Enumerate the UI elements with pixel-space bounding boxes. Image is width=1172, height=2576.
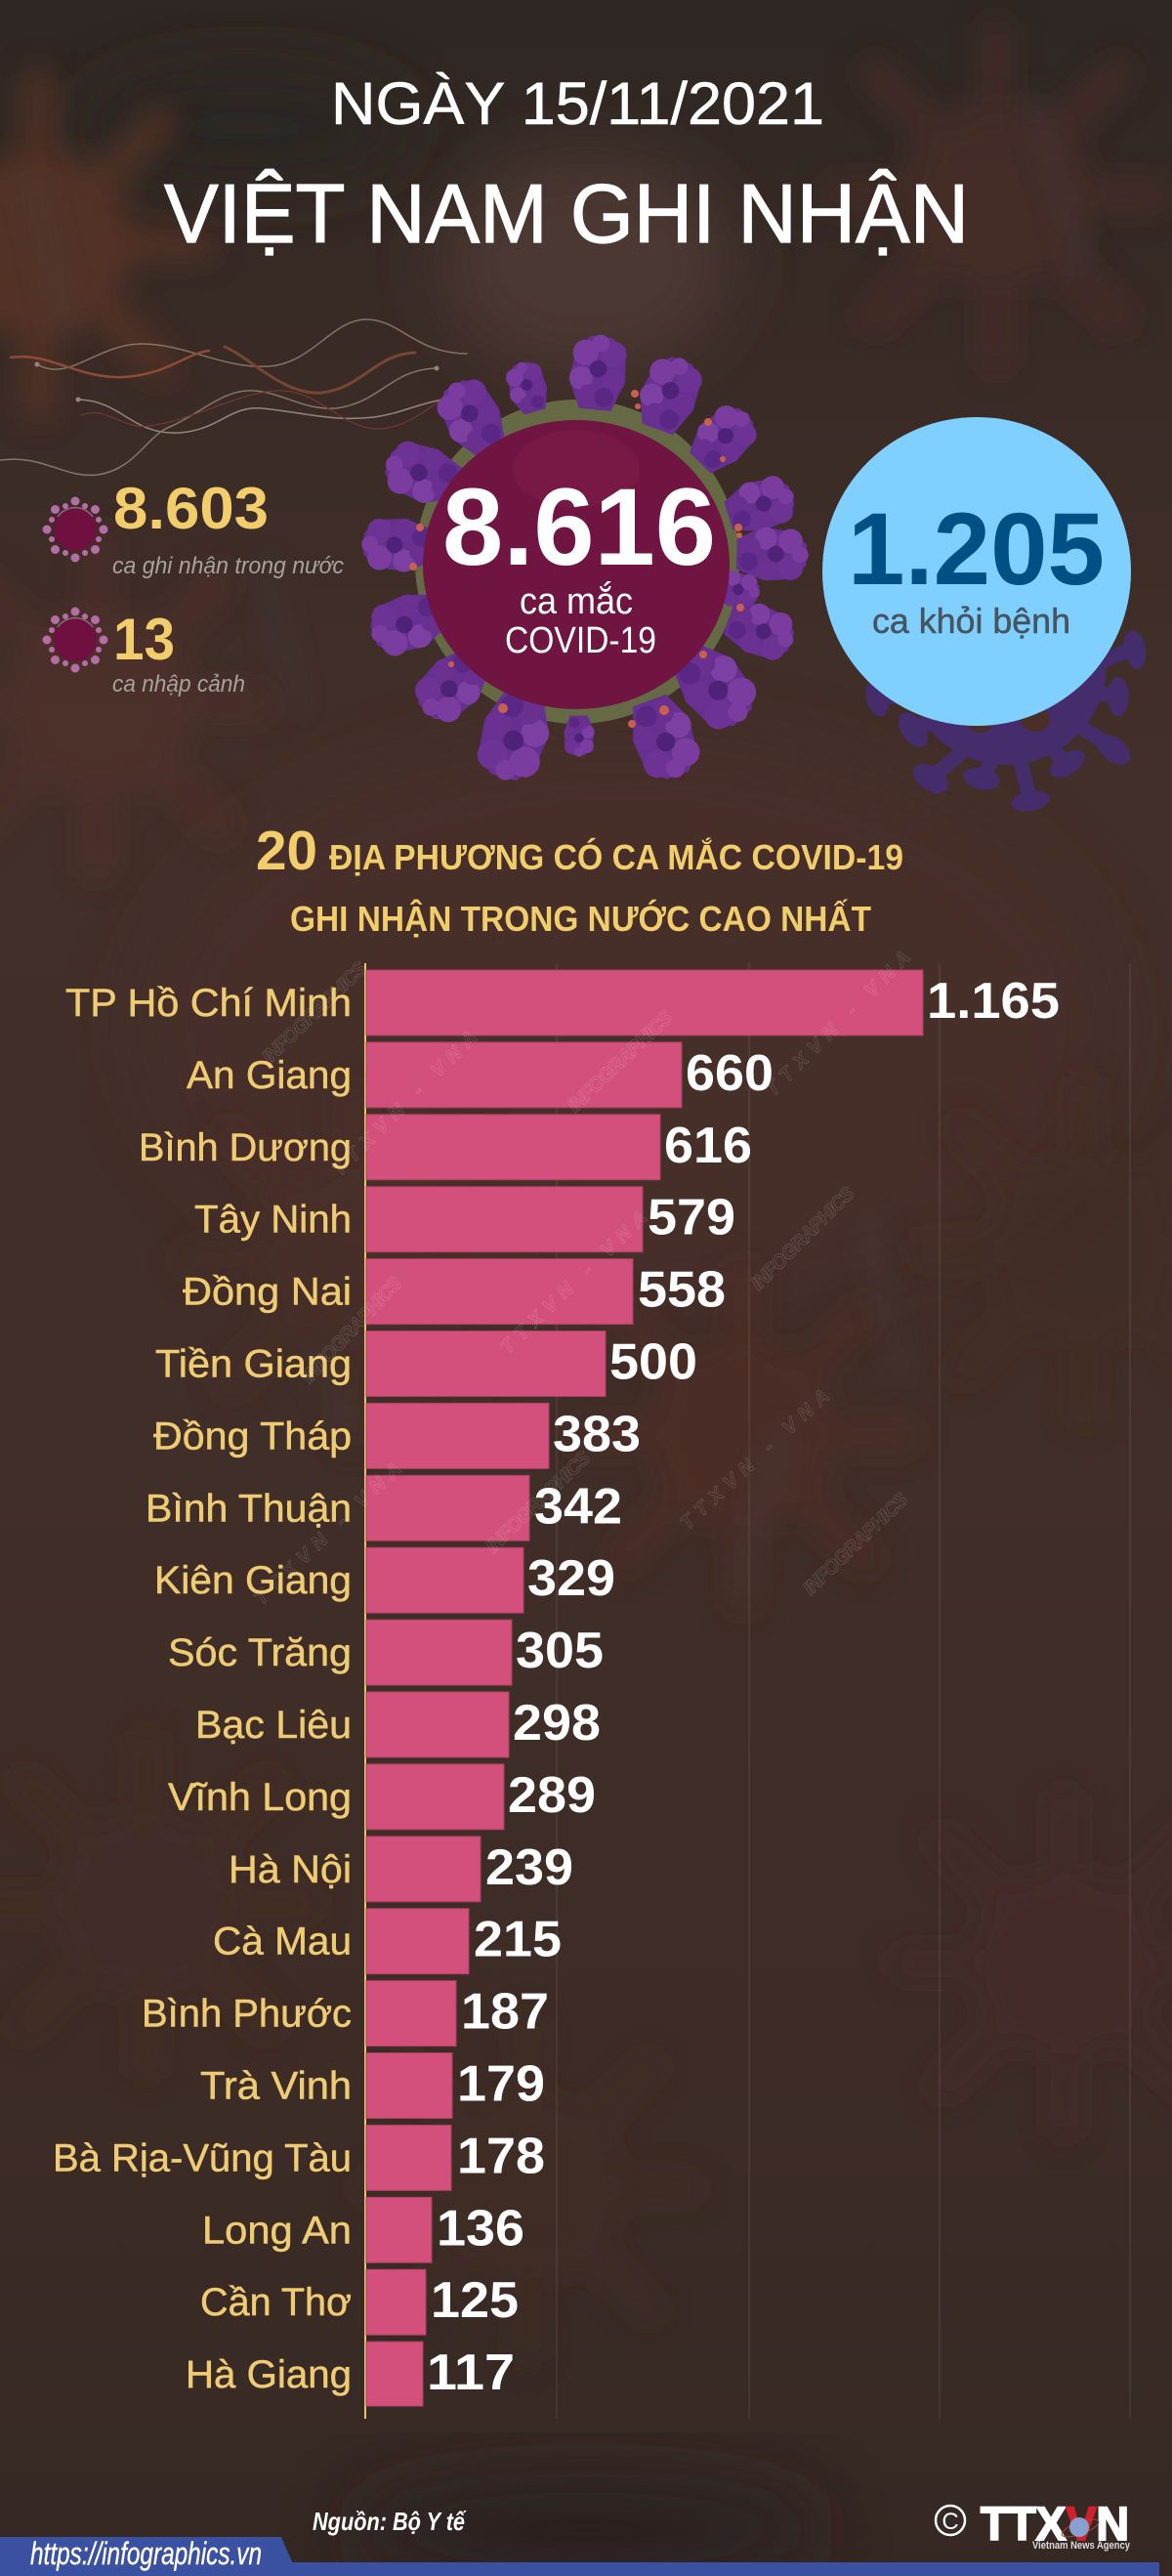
bar: Bình Thuận: Bình Thuận — [146, 1487, 352, 1530]
bar: Cà Mau: Cà Mau — [213, 1921, 352, 1964]
logo: TTXVN: C — [942, 2509, 959, 2535]
watermarks: INFOGRAPHICS — [564, 1006, 678, 1118]
total number: 8.616 — [442, 466, 716, 588]
icon: small virus 2 — [43, 608, 107, 672]
icon: large coronavirus with total cases — [360, 332, 810, 788]
bar: Đồng Tháp: Đồng Tháp — [153, 1415, 352, 1457]
stat: domestic cases: 8.603 — [113, 476, 269, 541]
watermarks: TTXVN - VNA — [328, 1028, 481, 1181]
title: main heading: VIỆT NAM GHI NHẬN — [164, 168, 969, 261]
bar: An Giang: 660 — [686, 1045, 774, 1102]
bar: Vĩnh Long: 289 — [508, 1767, 596, 1824]
bar: Kiên Giang — [154, 1547, 615, 1613]
bar: Đồng Tháp — [153, 1403, 641, 1468]
bar: Đồng Nai — [183, 1259, 726, 1325]
bar: Bạc Liêu: 298 — [513, 1695, 601, 1752]
bar: Bình Thuận — [146, 1475, 622, 1541]
bar: Bình Phước — [142, 1981, 549, 2047]
icon: small virus — [43, 496, 107, 563]
bar: Kiên Giang: Kiên Giang — [154, 1559, 352, 1602]
bar: Bạc Liêu: Bạc Liêu — [195, 1704, 352, 1747]
bar: Tây Ninh: 579 — [648, 1190, 735, 1246]
bar: Bà Rịa-Vũng Tàu: 178 — [457, 2128, 545, 2184]
bar: Tiền Giang — [155, 1330, 697, 1397]
bar: Bà Rịa-Vũng Tàu — [53, 2125, 545, 2190]
bar: Hà Giang — [186, 2342, 515, 2406]
bar: Hà Giang: Hà Giang — [186, 2353, 352, 2396]
bar: Cà Mau: 215 — [474, 1912, 562, 1968]
bar: An Giang — [187, 1042, 774, 1108]
watermarks — [250, 948, 915, 1610]
bar: Đồng Tháp: 383 — [553, 1406, 641, 1462]
stat: imported cases: 13 — [113, 607, 175, 672]
watermarks: INFOGRAPHICS — [258, 957, 372, 1069]
bar: Bà Rịa-Vũng Tàu: Bà Rịa-Vũng Tàu — [53, 2136, 352, 2179]
decorative virus strands — [0, 319, 479, 475]
chart heading — [256, 820, 903, 939]
total caption — [505, 580, 656, 661]
bar: Cần Thơ: 125 — [431, 2272, 519, 2329]
bar: Sóc Trăng: 305 — [516, 1623, 604, 1679]
bar: Vĩnh Long — [168, 1764, 596, 1830]
stat: imported cases: ca nhập cảnh — [112, 671, 245, 697]
watermarks: TTXVN - VNA — [762, 948, 915, 1101]
watermarks: INFOGRAPHICS — [298, 1273, 407, 1387]
chart heading: GHI NHẬN TRONG NƯỚC CAO NHẤT — [290, 898, 871, 939]
stat: imported cases — [43, 607, 245, 697]
bar: Kiên Giang: 329 — [527, 1550, 615, 1607]
watermarks: INFOGRAPHICS — [481, 1447, 596, 1558]
bar: TP Hồ Chí Minh: 1.165 — [927, 973, 1060, 1030]
watermarks: INFOGRAPHICS — [747, 1183, 859, 1295]
icon: dark purple virus behind recovered circle — [861, 564, 1149, 814]
total caption: COVID-19 — [505, 620, 656, 661]
bar: Hà Giang: 117 — [427, 2344, 515, 2401]
bar: Long An: Long An — [202, 2209, 352, 2252]
bar: Bạc Liêu — [195, 1692, 601, 1757]
bar: Hà Nội: Hà Nội — [229, 1848, 352, 1891]
bar: TP Hồ Chí Minh: TP Hồ Chí Minh — [65, 982, 352, 1025]
bar: Bình Dương: Bình Dương — [139, 1126, 352, 1169]
footer bar with URL: https://infographics.vn — [30, 2536, 262, 2571]
stat: domestic cases — [43, 476, 344, 579]
bar: Tiền Giang: 500 — [609, 1334, 697, 1391]
bar: Bình Thuận: 342 — [534, 1478, 622, 1535]
watermarks: TTXVN - VNA — [676, 1385, 834, 1535]
stat: recovered circle — [822, 417, 1131, 726]
bar: Bình Dương — [139, 1115, 752, 1180]
bar: Long An: 136 — [437, 2200, 524, 2257]
bar: Cần Thơ: Cần Thơ — [200, 2281, 352, 2324]
bar: Tây Ninh: Tây Ninh — [194, 1199, 352, 1242]
bar: Vĩnh Long: Vĩnh Long — [168, 1776, 352, 1819]
watermarks: TTXVN - VNA — [496, 1207, 651, 1359]
stat: domestic cases: ca ghi nhận trong nước — [112, 553, 344, 579]
bar chart: 20 localities — [53, 963, 1130, 2419]
watermarks: TTXVN - VNA — [250, 1458, 405, 1610]
bar: TP Hồ Chí Minh — [65, 970, 1060, 1035]
bar: Hà Nội: 239 — [485, 1839, 573, 1896]
bar: Trà Vinh — [200, 2053, 545, 2118]
bar: Hà Nội — [229, 1837, 573, 1902]
bar: Đồng Nai: 558 — [638, 1262, 726, 1319]
stat: recovered circle: ca khỏi bệnh — [872, 601, 1070, 641]
logo: TTXVN: Vietnam News Agency — [1032, 2540, 1131, 2552]
bar: Đồng Nai: Đồng Nai — [183, 1271, 352, 1314]
logo: TTXVN: TTXVN — [981, 2499, 1129, 2551]
bar: Long An — [202, 2197, 524, 2262]
footer bar with URL — [0, 2536, 1159, 2576]
bar: Tiền Giang: Tiền Giang — [155, 1342, 352, 1385]
bar: Bình Dương: 616 — [664, 1118, 752, 1174]
chart heading: ĐỊA PHƯƠNG CÓ CA MẮC COVID-19 — [329, 836, 903, 877]
bar: Cà Mau — [213, 1909, 562, 1974]
watermarks: INFOGRAPHICS — [799, 1489, 913, 1600]
bar: Sóc Trăng: Sóc Trăng — [168, 1631, 352, 1674]
bar: Trà Vinh: 179 — [457, 2055, 545, 2112]
source note: Nguồn: Bộ Y tế — [313, 2507, 467, 2536]
bar: Trà Vinh: Trà Vinh — [200, 2065, 352, 2108]
bar: Bình Phước: Bình Phước — [142, 1993, 352, 2036]
bar: Tây Ninh — [194, 1187, 735, 1252]
total caption: ca mắc — [520, 580, 633, 622]
bar: Cần Thơ — [200, 2269, 519, 2335]
bar: Sóc Trăng — [168, 1620, 604, 1685]
stat: recovered circle: 1.205 — [848, 492, 1105, 607]
title: date: NGÀY 15/11/2021 — [331, 70, 824, 137]
bar: Bình Phước: 187 — [461, 1984, 549, 2041]
chart heading: 20 — [256, 820, 317, 882]
bar: An Giang: An Giang — [187, 1054, 352, 1097]
